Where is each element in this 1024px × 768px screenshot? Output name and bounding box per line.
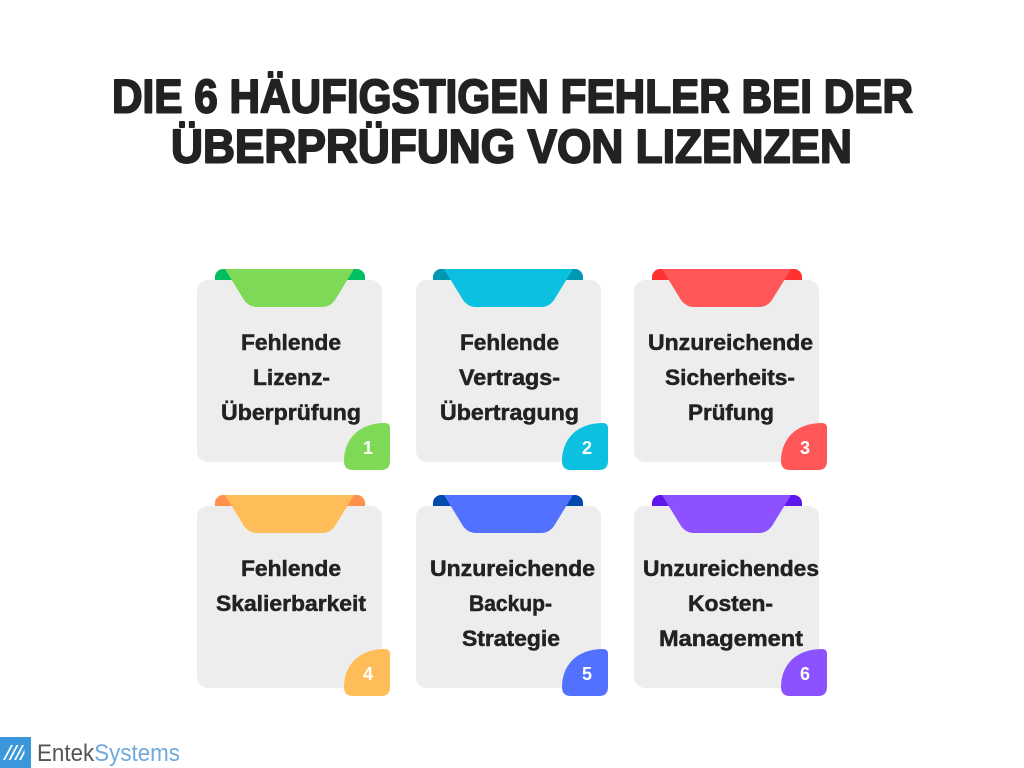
card 4 tab — [215, 495, 365, 506]
card 2 background — [416, 280, 601, 462]
card 1 number badge — [344, 423, 390, 470]
card 1 text: Lizenz- — [253, 365, 330, 390]
card 5 tab — [433, 495, 583, 506]
card 1 text — [221, 330, 361, 425]
card 5 text — [430, 556, 595, 651]
card 6 number badge: 6 — [800, 664, 810, 684]
card 6 tab — [652, 495, 802, 506]
card 2 number badge — [562, 423, 608, 470]
card 1 tab — [215, 269, 365, 280]
card 2 ribbon — [444, 269, 573, 307]
title: ÜBERPRÜFUNG VON LIZENZEN — [171, 120, 852, 174]
card 6 text — [643, 556, 819, 651]
card 3 number badge: 3 — [800, 438, 810, 458]
card 1 text: Fehlende — [241, 330, 341, 355]
card 1 text: Überprüfung — [221, 400, 361, 425]
panel: card 5 Unzureichende Backup-Strategie — [416, 495, 608, 696]
title — [112, 70, 913, 174]
card 4 text: Skalierbarkeit — [216, 591, 367, 616]
card 3 text: Unzureichende — [648, 330, 813, 355]
card 5 number badge: 5 — [582, 664, 592, 684]
card 1 ribbon — [225, 269, 354, 307]
card 5 background — [416, 506, 601, 688]
card 4 number badge — [344, 649, 390, 696]
panel: card 4 Fehlende Skalierbarkeit — [197, 495, 390, 696]
card 6 text: Management — [659, 626, 804, 651]
card 6 ribbon — [662, 495, 791, 533]
panel: card 6 Unzureichendes Kosten-Management — [634, 495, 827, 696]
card 5 ribbon — [444, 495, 573, 533]
card 3 text: Prüfung — [688, 400, 774, 425]
card 5 text: Unzureichende — [430, 556, 595, 581]
card 4 number badge: 4 — [363, 664, 373, 684]
card 4 text — [216, 556, 367, 616]
panel: card 1 Fehlende Lizenz-Überprüfung — [197, 269, 390, 470]
card 5 number badge — [562, 649, 608, 696]
logo: EntekSystems — [0, 737, 180, 768]
card 5 text: Backup- — [469, 591, 552, 616]
card 3 text: Sicherheits- — [665, 365, 795, 390]
card 3 ribbon — [662, 269, 791, 307]
card 2 number badge: 2 — [582, 438, 592, 458]
card 3 number badge — [781, 423, 827, 470]
card 6 text: Kosten- — [688, 591, 773, 616]
card 6 number badge — [781, 649, 827, 696]
logo wordmark: EntekSystems — [37, 740, 180, 767]
card 2 text: Fehlende — [460, 330, 559, 355]
card 2 text — [440, 330, 579, 425]
icon: logo square with stripes — [0, 737, 31, 768]
card 6 text: Unzureichendes — [643, 556, 819, 581]
card 2 tab — [433, 269, 583, 280]
card 4 text: Fehlende — [241, 556, 341, 581]
card 3 text — [648, 330, 813, 425]
card 4 ribbon — [225, 495, 354, 533]
panel: card 2 Fehlende Vertrags-Übertragung — [416, 269, 608, 470]
card 6 background — [634, 506, 819, 688]
card 2 text: Vertrags- — [459, 365, 560, 390]
card 1 number badge: 1 — [363, 438, 373, 458]
card 4 background — [197, 506, 382, 688]
card 2 text: Übertragung — [440, 400, 579, 425]
panel: card 3 Unzureichende Sicherheits-Prüfung — [634, 269, 827, 470]
card 3 tab — [652, 269, 802, 280]
card 1 background — [197, 280, 382, 462]
card 3 background — [634, 280, 819, 462]
card 5 text: Strategie — [462, 626, 560, 651]
title: DIE 6 HÄUFIGSTIGEN FEHLER BEI DER — [112, 70, 913, 124]
